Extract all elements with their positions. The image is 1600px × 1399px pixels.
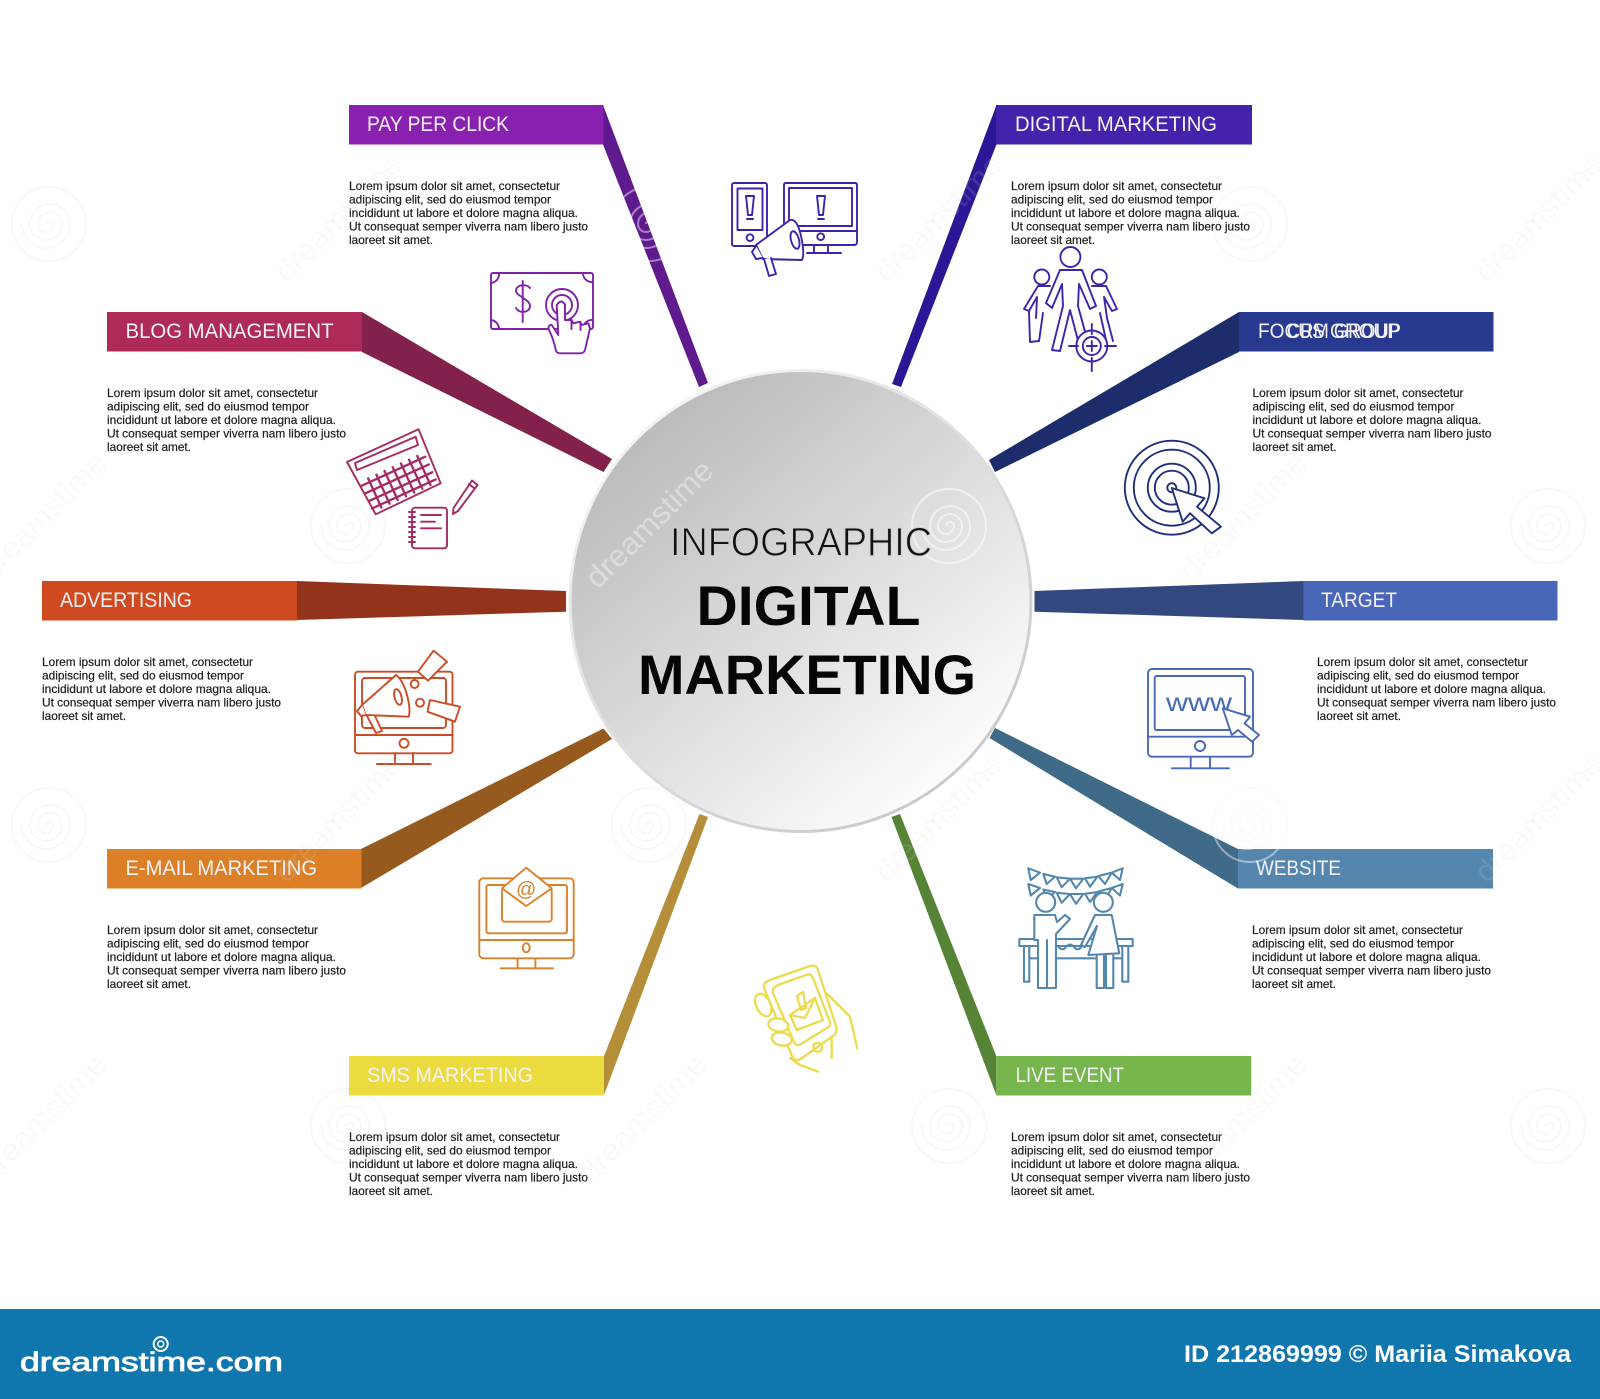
overlapping heading: CRM GROUP — [1287, 320, 1401, 343]
body text: laoreet sit amet. — [1317, 709, 1401, 723]
body text: adipiscing elit, sed do eiusmod tempor — [1011, 192, 1213, 206]
heading: TARGET — [1321, 589, 1397, 612]
body text: Ut consequat semper viverra nam libero justo — [107, 426, 346, 440]
heading bar — [996, 105, 1252, 144]
body text: Lorem ipsum dolor sit amet, consectetur — [1252, 386, 1464, 400]
connector — [361, 728, 612, 888]
icon: banknote with clicking hand — [491, 273, 593, 353]
body text: incididunt ut labore et dolore magna aliqua. — [1011, 206, 1240, 220]
body text: adipiscing elit, sed do eiusmod tempor — [1252, 400, 1454, 414]
body text — [1252, 923, 1491, 991]
icon: hand holding phone with message — [752, 966, 857, 1072]
watermark on circle: dreamstime — [578, 453, 720, 595]
heading: E-MAIL MARKETING — [126, 857, 317, 880]
body text: Lorem ipsum dolor sit amet, consectetur — [107, 923, 318, 937]
body text: Lorem ipsum dolor sit amet, consectetur — [107, 386, 318, 400]
footer logo — [20, 1337, 283, 1377]
icon: monitor with e-mail envelope: @ — [516, 879, 536, 901]
connector — [892, 105, 996, 387]
body text: Ut consequat semper viverra nam libero justo — [349, 1170, 588, 1184]
body text: Lorem ipsum dolor sit amet, consectetur — [1011, 179, 1222, 193]
body text: adipiscing elit, sed do eiusmod tempor — [107, 400, 309, 414]
heading: ADVERTISING — [60, 589, 192, 612]
footer band — [0, 1309, 1600, 1399]
heading: LIVE EVENT — [1016, 1064, 1124, 1087]
heading bar — [107, 312, 362, 352]
icon: three people with target — [1024, 247, 1117, 371]
heading: PAY PER CLICK — [367, 113, 509, 136]
title line: digital: DIGITAL — [696, 574, 920, 637]
body text — [107, 923, 346, 991]
panel: sms marketing — [349, 814, 857, 1198]
icon: calendar, notebook and pencil — [347, 429, 478, 548]
body text: laoreet sit amet. — [349, 1184, 433, 1198]
body text — [1011, 179, 1250, 247]
panel: advertising — [42, 581, 566, 764]
central circle — [570, 370, 1031, 832]
panel: website — [990, 669, 1493, 991]
heading bar — [1239, 312, 1494, 352]
body text: incididunt ut labore et dolore magna aliqua. — [349, 1157, 578, 1171]
panel: digital marketing — [732, 105, 1252, 387]
heading: SMS MARKETING — [367, 1064, 533, 1087]
body text: adipiscing elit, sed do eiusmod tempor — [107, 936, 309, 950]
connector — [297, 581, 566, 620]
watermark spirals — [12, 187, 1585, 1163]
body text: incididunt ut labore et dolore magna aliqua. — [1252, 950, 1481, 964]
body text: Lorem ipsum dolor sit amet, consectetur — [1011, 1130, 1222, 1144]
body text: laoreet sit amet. — [349, 233, 433, 247]
body text: incididunt ut labore et dolore magna aliqua. — [42, 682, 271, 696]
watermark over connectors: dreamstime — [267, 147, 409, 289]
body text: laoreet sit amet. — [1252, 977, 1336, 991]
heading bar — [349, 105, 604, 144]
body text: laoreet sit amet. — [1011, 233, 1095, 247]
body text: adipiscing elit, sed do eiusmod tempor — [1252, 936, 1454, 950]
body text — [42, 655, 281, 723]
heading bar — [1238, 849, 1493, 888]
heading: FOCUS GROUP — [1258, 320, 1400, 343]
heading: DIGITAL MARKETING — [1015, 113, 1217, 136]
heading: BLOG MANAGEMENT — [126, 320, 334, 343]
watermark on circle — [578, 453, 986, 595]
icon: monitor with www and cursor — [1148, 669, 1259, 768]
body text: incididunt ut labore et dolore magna aliqua. — [1317, 682, 1546, 696]
body text: Ut consequat semper viverra nam libero justo — [42, 696, 281, 710]
body text — [1011, 1130, 1250, 1198]
footer logo: dreamstime.com — [20, 1347, 283, 1377]
heading: WEBSITE — [1256, 857, 1341, 880]
watermark over connectors: dreamstime — [867, 747, 1009, 889]
body text: Lorem ipsum dolor sit amet, consectetur — [349, 1130, 560, 1144]
image credit: ID 212869999 © Mariia Simakova — [1184, 1341, 1572, 1368]
body text: incididunt ut labore et dolore magna aliqua. — [1252, 413, 1482, 427]
connector — [892, 814, 996, 1095]
body text — [1317, 655, 1556, 723]
body text: Lorem ipsum dolor sit amet, consectetur — [42, 655, 253, 669]
body text: Ut consequat semper viverra nam libero justo — [1011, 1170, 1250, 1184]
icon: devices and megaphone — [732, 183, 857, 276]
heading bar — [107, 849, 362, 888]
icon: two people at a party table — [1019, 868, 1133, 988]
body text: laoreet sit amet. — [1252, 440, 1336, 454]
body text — [349, 179, 588, 247]
icon: target with cursor — [1125, 441, 1221, 535]
heading bar — [1304, 581, 1558, 620]
watermark over connectors: dreamstime — [267, 747, 409, 889]
body text: Lorem ipsum dolor sit amet, consectetur — [1317, 655, 1528, 669]
panel: focus group — [989, 247, 1494, 472]
body text: adipiscing elit, sed do eiusmod tempor — [1011, 1144, 1213, 1158]
heading bar — [349, 1056, 604, 1096]
connector — [603, 105, 708, 387]
connector — [1034, 581, 1304, 620]
body text: incididunt ut labore et dolore magna aliqua. — [349, 206, 578, 220]
watermark over connectors: dreamstime — [1171, 1047, 1313, 1189]
icon: monitor with megaphone — [355, 651, 460, 764]
body text: Ut consequat semper viverra nam libero justo — [1252, 426, 1492, 440]
title line: marketing: MARKETING — [638, 643, 976, 706]
body text — [107, 386, 346, 454]
connector — [990, 728, 1238, 888]
title line: infographic: INFOGRAPHIC — [670, 520, 932, 564]
body text: incididunt ut labore et dolore magna aliqua. — [1011, 1157, 1240, 1171]
panel: e-mail marketing — [107, 728, 612, 991]
body text: adipiscing elit, sed do eiusmod tempor — [1317, 668, 1519, 682]
panel: pay per click — [349, 105, 708, 387]
body text: incididunt ut labore et dolore magna aliqua. — [107, 413, 336, 427]
body text: Ut consequat semper viverra nam libero justo — [1252, 964, 1491, 978]
body text: Ut consequat semper viverra nam libero justo — [349, 220, 588, 234]
body text: Lorem ipsum dolor sit amet, consectetur — [1252, 923, 1463, 937]
body text: adipiscing elit, sed do eiusmod tempor — [349, 1144, 551, 1158]
panel: live event — [892, 814, 1251, 1198]
icon: monitor with e-mail envelope — [479, 868, 574, 968]
body text — [349, 1130, 588, 1198]
panel: target — [1034, 441, 1558, 723]
watermark over connectors — [0, 147, 1600, 1189]
connector — [604, 814, 708, 1095]
watermark over connectors: dreamstime — [867, 147, 1009, 289]
body text: adipiscing elit, sed do eiusmod tempor — [42, 668, 244, 682]
body text: incididunt ut labore et dolore magna aliqua. — [107, 950, 336, 964]
body text: Ut consequat semper viverra nam libero justo — [1317, 696, 1556, 710]
body text: laoreet sit amet. — [42, 709, 126, 723]
body text: laoreet sit amet. — [107, 440, 191, 454]
body text — [1252, 386, 1492, 454]
watermark over connectors: dreamstime — [571, 1047, 713, 1189]
body text: laoreet sit amet. — [107, 977, 191, 991]
icon: monitor with www and cursor: www — [1165, 689, 1233, 717]
body text: laoreet sit amet. — [1011, 1184, 1095, 1198]
panel: blog management — [107, 312, 612, 548]
body text: Ut consequat semper viverra nam libero justo — [1011, 220, 1250, 234]
watermark over connectors: dreamstime — [1171, 445, 1313, 587]
body text: Ut consequat semper viverra nam libero justo — [107, 964, 346, 978]
connector — [989, 312, 1239, 472]
connector — [362, 312, 612, 472]
heading bar — [42, 581, 297, 620]
body text: Lorem ipsum dolor sit amet, consectetur — [349, 179, 560, 193]
heading bar — [996, 1056, 1251, 1096]
body text: adipiscing elit, sed do eiusmod tempor — [349, 192, 551, 206]
